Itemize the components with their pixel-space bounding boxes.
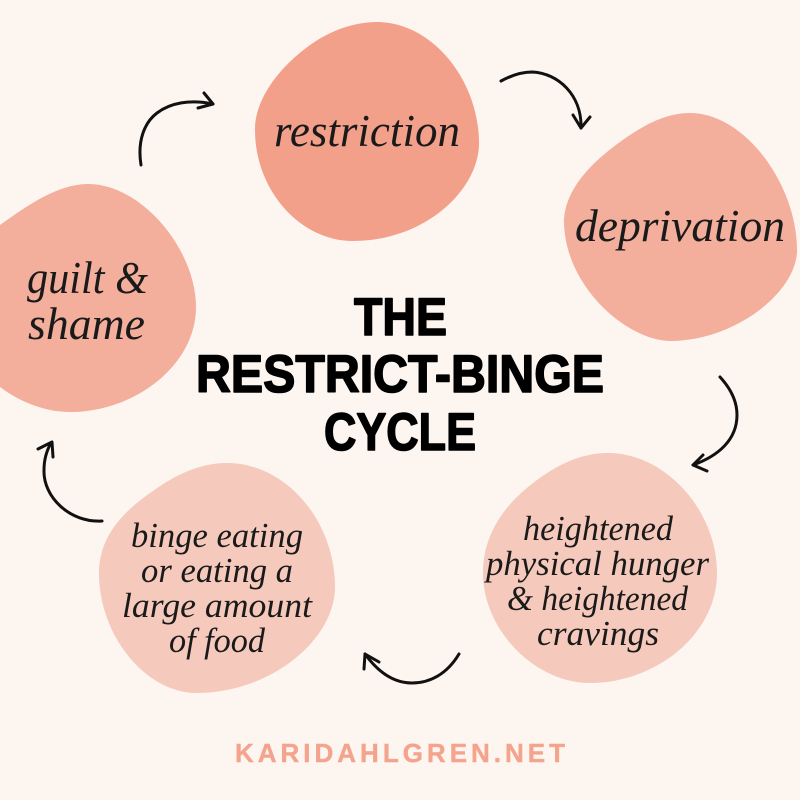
website footer: KARIDAHLGREN.NET [235, 738, 565, 768]
title: CYCLE [324, 403, 476, 462]
label: heightened hunger and cravings: & heightened [507, 579, 688, 618]
blob: deprivation [564, 113, 797, 341]
label: heightened hunger and cravings [483, 509, 709, 653]
label: binge eating: large amount [122, 586, 313, 625]
blob: restriction [255, 22, 479, 241]
label: binge eating: of food [169, 621, 265, 660]
arrow: deprivation to hunger [693, 377, 737, 471]
label: guilt and shame: guilt & [27, 253, 148, 303]
arrow: guilt to restriction [140, 93, 213, 165]
label: binge eating [122, 516, 313, 660]
label: heightened hunger and cravings: cravings [537, 614, 659, 653]
blob: heightened hunger [483, 453, 717, 683]
blob: binge eating [99, 463, 335, 693]
label: guilt and shame [27, 253, 148, 349]
title [196, 288, 604, 462]
title: THE [354, 288, 447, 347]
arrow: binge to guilt [38, 442, 102, 521]
title: RESTRICT-BINGE [196, 345, 604, 404]
label: guilt and shame: shame [28, 299, 145, 349]
label: heightened hunger and cravings: heightened [523, 509, 673, 548]
label: heightened hunger and cravings: physical hunger [483, 544, 709, 583]
blob: guilt and shame [0, 184, 196, 412]
arrow: restriction to deprivation [501, 72, 590, 128]
label: binge eating: or eating a [141, 551, 293, 590]
label: restriction: restriction [274, 105, 460, 156]
label: binge eating: binge eating [131, 516, 303, 555]
label: deprivation: deprivation [575, 200, 785, 251]
arrow: hunger to binge [364, 654, 459, 683]
